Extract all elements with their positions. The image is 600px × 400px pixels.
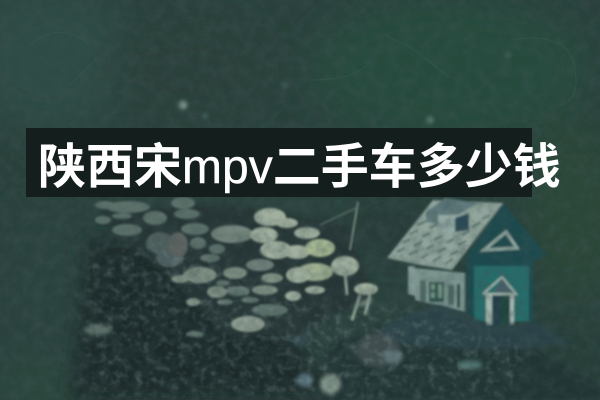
- foreground foliage over house base: [395, 305, 570, 350]
- forest branches: [30, 32, 576, 105]
- tree stump: [70, 235, 340, 400]
- house: [387, 198, 547, 326]
- ground foliage: [84, 294, 600, 400]
- light specks: [179, 53, 510, 123]
- mushroom cluster shadow: [100, 205, 375, 335]
- title: 陕西宋mpv二手车多少钱: [38, 141, 561, 194]
- mushrooms: [95, 197, 378, 337]
- title banner background: [26, 128, 532, 197]
- light texture in lower scene: [80, 244, 530, 399]
